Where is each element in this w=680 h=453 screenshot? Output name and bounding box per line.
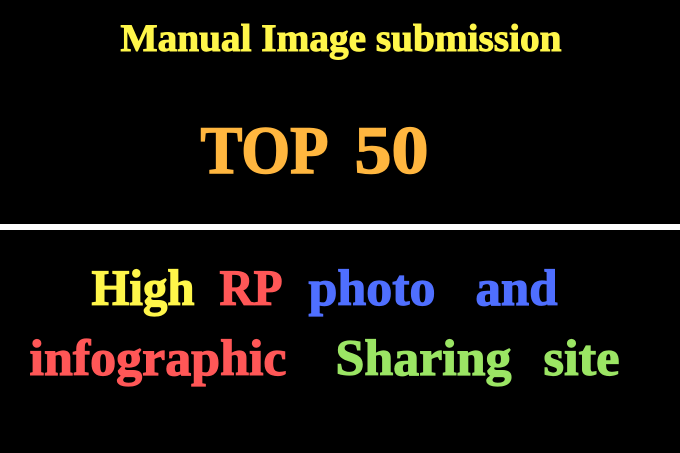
title: Manual Image submission: Manual Image submission bbox=[120, 17, 562, 60]
text line: High RP photo and: High bbox=[92, 261, 194, 317]
headline: TOP 50: 50 bbox=[354, 112, 428, 188]
text line: infographic Sharing site bbox=[30, 331, 620, 387]
headline: TOP 50 bbox=[200, 112, 428, 188]
text line: High RP photo and: and bbox=[476, 261, 558, 317]
text line: infographic Sharing site: infographic bbox=[30, 331, 286, 387]
text line: High RP photo and bbox=[92, 261, 558, 317]
text line: infographic Sharing site: site bbox=[544, 331, 620, 387]
text line: High RP photo and: RP bbox=[220, 261, 282, 317]
white divider bar bbox=[0, 224, 680, 230]
text line: High RP photo and: photo bbox=[308, 261, 436, 317]
headline: TOP 50: TOP bbox=[200, 112, 328, 188]
text line: infographic Sharing site: Sharing bbox=[336, 331, 512, 387]
